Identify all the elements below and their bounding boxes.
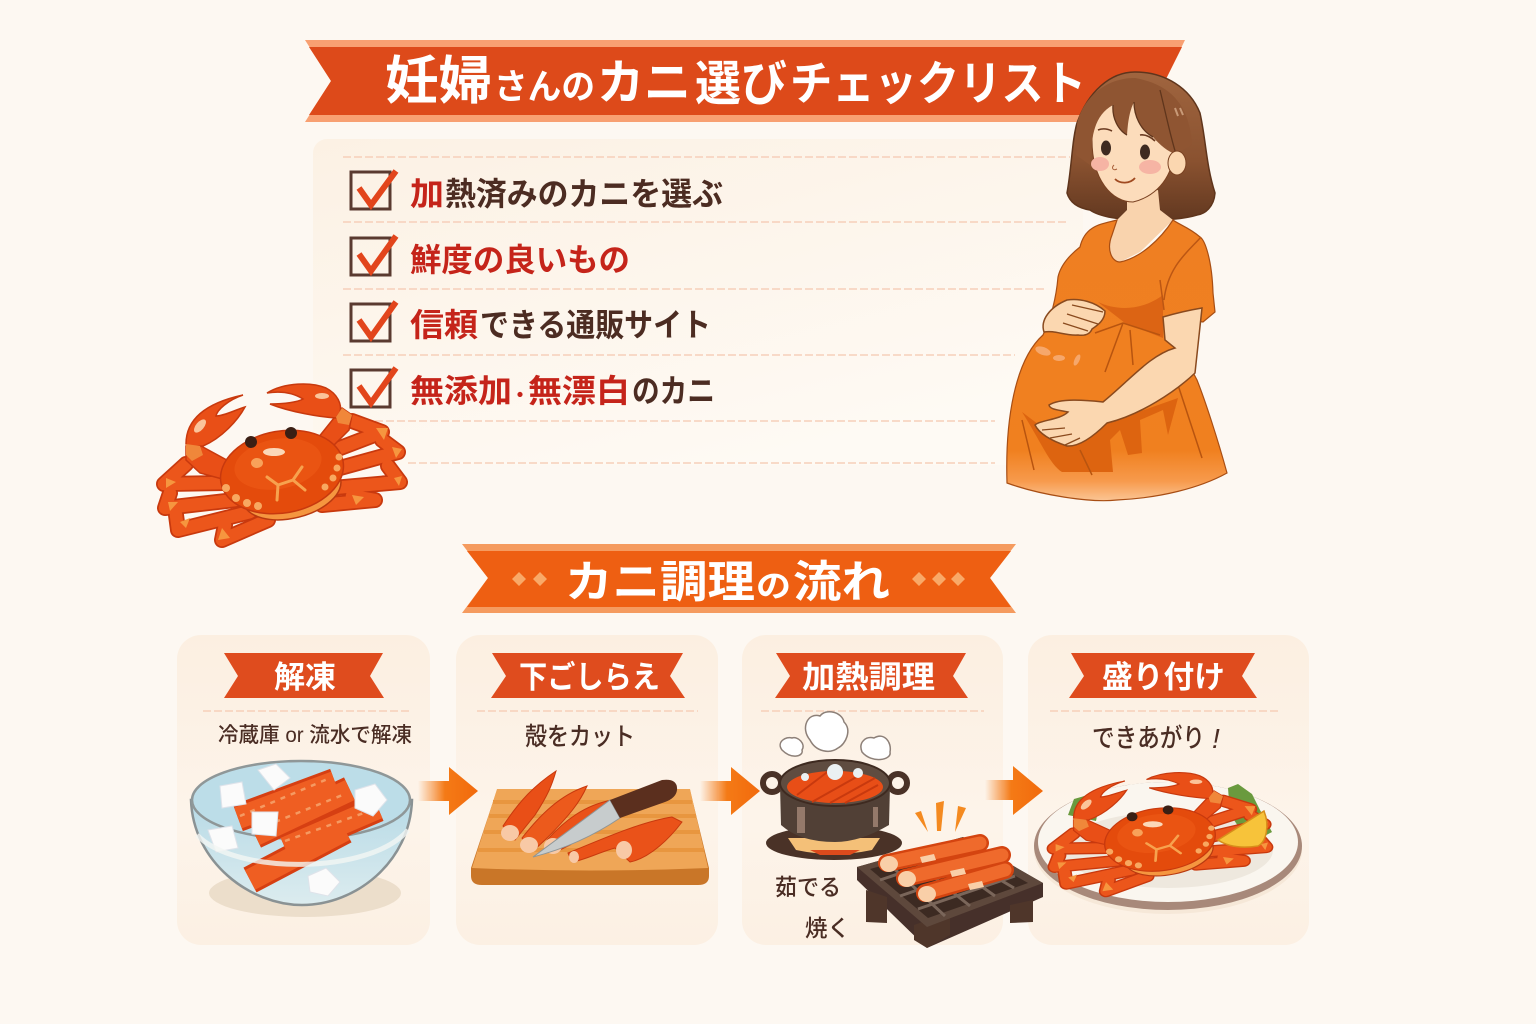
checklist item 2: 鮮度の良いもの [410,242,630,278]
arrow 3 [985,766,1043,815]
section heading text: 流れ [793,558,890,607]
checklist item 3: できる通販サイト [480,307,711,343]
panel: checklist [313,139,1083,465]
checklist item 2 [351,236,630,278]
step ribbon: 加熱調理 [802,660,935,695]
section heading text: カニ調理 [565,558,755,607]
checklist item 1 [351,171,723,212]
icon: plated crab [1034,773,1302,914]
step card 4: plating [1028,635,1309,945]
icon: steam [780,712,890,760]
icon: cutting board with knife [471,771,709,885]
title text: チェックリスト [790,57,1086,110]
step ribbon [1069,653,1257,698]
section banner: cooking flow [462,544,1016,613]
step ribbon [775,653,968,698]
arrow 1 [418,767,478,815]
step ribbon [491,653,685,698]
lemon wedge [1218,811,1267,847]
title text: 妊婦 [385,53,492,111]
caption: grill: 焼く [805,915,850,941]
step ribbon: 盛り付け [1102,660,1225,695]
title text: カニ [597,57,691,110]
step caption: 殻をカット [525,723,635,751]
arrow 2 [700,767,760,815]
illustration: pregnant woman [1007,72,1227,501]
illustration: crab [164,384,402,540]
checklist item 1: 熱済みのカニを選ぶ [445,176,723,212]
title text: 選び [695,58,787,111]
checklist item 4: のカニ [632,373,715,409]
banner diamonds right [912,572,965,586]
icon: pot on stove [763,760,907,860]
title text [385,53,1086,111]
step ribbon: 解凍 [274,660,336,695]
checklist item 4: 無漂白 [528,373,630,409]
step card 3: heating [742,635,1043,948]
checklist item 4: ・ [510,385,530,407]
checklist item 4: 無添加 [410,373,512,409]
step caption: 冷蔵庫 or 流水で解凍 [218,724,412,747]
icon: glass bowl with crab legs [191,761,412,917]
step caption: ! [1212,723,1220,754]
section heading text: の [756,569,791,604]
step caption: できあがり [1092,723,1205,753]
checklist item 1: 加 [410,176,444,212]
step card 2: preparation [456,635,718,945]
checklist item 4 [351,368,715,409]
caption: boil: 茹でる [775,874,841,900]
banner diamonds left [512,572,547,586]
step ribbon [224,653,384,698]
step ribbon: 下ごしらえ [519,660,660,695]
section heading text [565,558,890,607]
icon: spark marks [915,801,966,832]
checklist item 3 [351,302,711,343]
icon: grill with crab legs [857,837,1043,948]
title text: さんの [494,68,595,107]
checklist item 3: 信頼 [410,307,478,343]
title banner [305,40,1185,122]
step card 1: thawing [177,635,430,945]
